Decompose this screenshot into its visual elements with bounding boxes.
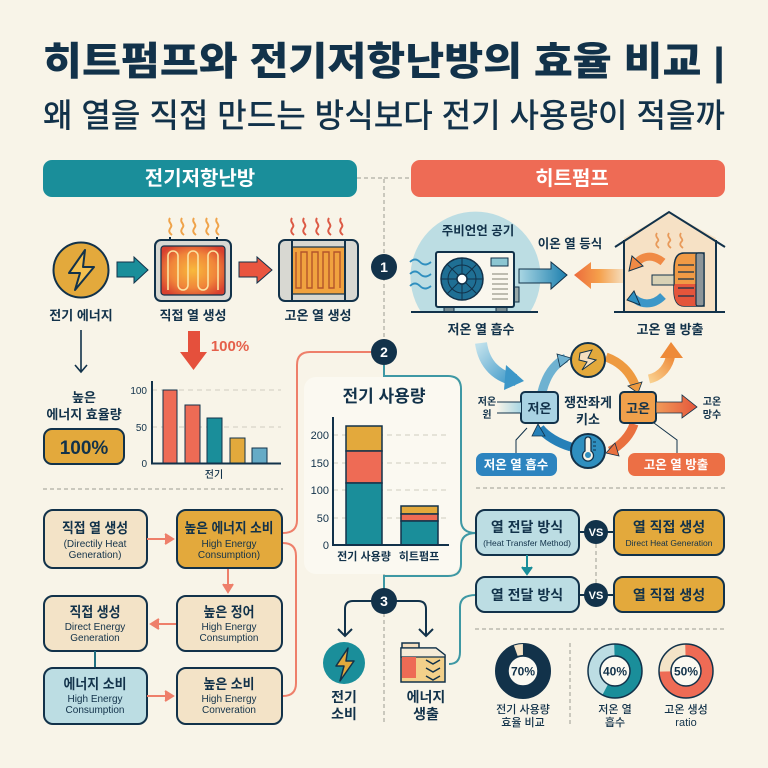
callout: 100 percent bbox=[44, 429, 124, 464]
donut chart: 50 percent: ratio bbox=[675, 717, 697, 729]
label pill: low temp absorption: 저온 열 흡수 bbox=[484, 457, 548, 472]
arrow: energy to heater bbox=[117, 257, 148, 283]
step number 3 bbox=[371, 588, 397, 614]
box: direct generation: 직접 생성 bbox=[70, 604, 120, 620]
step number 3: 3 bbox=[380, 593, 388, 609]
donut chart: 70 percent: 전기 사용량 bbox=[496, 702, 550, 716]
arrow: row 3 bbox=[147, 691, 173, 701]
box: high control: High Energy bbox=[201, 622, 257, 633]
label: electric energy: 전기 에너지 bbox=[49, 308, 113, 323]
label: high temp release: 고온 열 방출 bbox=[636, 322, 704, 337]
bar chart: energy: 50 bbox=[136, 423, 147, 434]
stacked bar chart: 0 bbox=[323, 540, 329, 552]
bar chart: energy bbox=[130, 381, 281, 481]
label: high temp output: 고온 bbox=[703, 396, 721, 408]
stacked bar chart: 50 bbox=[317, 513, 329, 525]
box: direct heat generation: 직접 열 생성 bbox=[62, 520, 128, 536]
box: high consumption: Converation bbox=[202, 705, 256, 716]
box: high energy consumption: High Energy bbox=[201, 539, 257, 550]
label: high temp output bbox=[703, 396, 721, 421]
stacked bar chart bbox=[311, 417, 449, 563]
box: heat transfer method bbox=[476, 510, 579, 555]
VS badge 2: VS bbox=[589, 590, 603, 602]
label: energy output bbox=[407, 689, 445, 722]
step number 1: 1 bbox=[380, 259, 388, 275]
box: high consumption: High Energy bbox=[201, 694, 257, 705]
box: heat transfer method: 열 전달 방식 bbox=[491, 519, 563, 535]
label: low temp absorption: 저온 열 흡수 bbox=[447, 322, 515, 337]
arrow: down bbox=[522, 555, 532, 574]
VS badge 1: VS bbox=[589, 527, 603, 539]
compressor icon bbox=[571, 343, 605, 377]
donut chart: 40 percent bbox=[588, 644, 642, 729]
label: high temp heat: 고온 열 생성 bbox=[284, 308, 352, 323]
label pill: high temp release bbox=[628, 423, 725, 476]
arrow: outdoor to middle bbox=[519, 262, 567, 289]
box: direct generation bbox=[44, 596, 147, 651]
box: energy consumption: 에너지 소비 bbox=[64, 676, 126, 692]
label: electricity consumption: 소비 bbox=[331, 706, 357, 722]
stacked bar chart: 150 bbox=[311, 458, 329, 470]
icon: energy output bbox=[401, 643, 445, 682]
inlet lines bbox=[497, 402, 521, 413]
label: medium: 이온 열 등식 bbox=[538, 236, 602, 251]
box: high energy consumption: Consumption) bbox=[198, 550, 260, 561]
box: direct heat generation: 열 직접 생성 bbox=[633, 519, 705, 535]
stacked bar chart: 히트펌프 bbox=[399, 550, 439, 563]
arrow: high temp output bbox=[656, 395, 697, 418]
box: high energy consumption bbox=[177, 510, 282, 568]
label: electricity consumption bbox=[331, 689, 357, 722]
stacked bar chart: 200 bbox=[311, 430, 329, 442]
label pill: low temp absorption bbox=[476, 428, 557, 476]
box: high control bbox=[177, 596, 282, 651]
box: direct heat generation 2: 열 직접 생성 bbox=[633, 587, 705, 603]
box: high energy consumption: 높은 에너지 소비 bbox=[184, 520, 274, 536]
box: heat transfer method: (Heat Transfer Method) bbox=[483, 538, 571, 548]
icon: high temperature heater bbox=[279, 218, 358, 301]
label: energy output: 에너지 bbox=[407, 689, 445, 705]
step number 2: 2 bbox=[380, 344, 388, 360]
donut chart: 50 percent: 50% bbox=[674, 664, 698, 678]
label: energy output: 생출 bbox=[413, 706, 439, 722]
box: high control: 높은 정어 bbox=[204, 604, 254, 620]
heading: electric resistance heating: 전기저항난방 bbox=[145, 167, 255, 190]
label: high energy efficiency: 높은 bbox=[72, 390, 96, 405]
bar chart: energy: 100 bbox=[130, 386, 147, 397]
donut chart: 70 percent: 효율 비교 bbox=[501, 716, 545, 729]
panel: resistance flow boxes bbox=[44, 510, 282, 724]
box: energy consumption: High Energy bbox=[67, 694, 123, 705]
label pill: high temp release: 고온 열 방출 bbox=[644, 457, 708, 472]
box: heat transfer method 2 bbox=[476, 577, 579, 612]
box: high control: Consumption bbox=[200, 633, 258, 644]
donut chart: 40 percent: 저온 열 bbox=[598, 703, 632, 716]
label: direct heat: 직접 열 생성 bbox=[159, 308, 227, 323]
arrow: down to efficiency bbox=[75, 330, 87, 372]
icon: electric energy bbox=[54, 242, 108, 298]
arrow: house to middle bbox=[574, 262, 624, 289]
callout: 100 percent: 100% bbox=[60, 438, 108, 459]
label: cycle center bbox=[564, 395, 612, 427]
icon: house with indoor unit bbox=[614, 212, 725, 312]
step number 2 bbox=[371, 339, 397, 365]
arrow: absorption to cycle bbox=[481, 343, 524, 390]
step number 1 bbox=[371, 254, 397, 280]
cycle arrows bbox=[540, 357, 635, 451]
panel: heat pump diagram bbox=[410, 212, 725, 476]
box: direct heat generation: (Directily Heat bbox=[64, 539, 127, 550]
label: electricity consumption: 전기 bbox=[331, 689, 357, 705]
arrow: 100 percent down bbox=[180, 331, 207, 370]
donut chart: 50 percent: 고온 생성 bbox=[664, 703, 708, 716]
label: high temp output: 망수 bbox=[703, 408, 721, 421]
heading: heat pump bbox=[411, 160, 725, 197]
box: direct heat generation: Direct Heat Generation bbox=[626, 538, 713, 548]
donut chart: 50 percent bbox=[659, 644, 713, 729]
arrow: step 3 to energy output bbox=[396, 601, 433, 636]
label: high energy efficiency bbox=[46, 390, 122, 422]
arrow: row 2 bbox=[151, 619, 176, 629]
box: energy consumption: Consumption bbox=[66, 705, 124, 716]
box: direct heat generation bbox=[44, 510, 147, 568]
box: high temp: 고온 bbox=[626, 401, 650, 416]
panel: comparison boxes bbox=[476, 510, 724, 612]
bar chart: energy: 전기 bbox=[205, 469, 223, 481]
panel: electricity usage chart bbox=[304, 377, 460, 574]
label: cycle center: 키소 bbox=[576, 412, 600, 427]
box: direct heat generation bbox=[614, 510, 724, 555]
arrow: cycle up to release bbox=[649, 342, 683, 379]
icon: direct heater bbox=[155, 218, 231, 301]
label: 100 percent: 100% bbox=[211, 338, 249, 355]
box: low temp: 저온 bbox=[528, 401, 551, 416]
bar chart: energy: 0 bbox=[141, 459, 147, 470]
title: 히트펌프와 전기저항난방의 효율 비교 | bbox=[43, 41, 725, 84]
box: high consumption: 높은 소비 bbox=[204, 676, 254, 692]
arrow: step 3 to electricity consumption bbox=[338, 601, 372, 636]
stacked bar chart: 전기 사용량 bbox=[337, 549, 391, 563]
panel: electric heating flow bbox=[44, 218, 358, 481]
label: low temp input: 저온 bbox=[478, 395, 496, 408]
arrow: down bbox=[223, 569, 233, 592]
box: energy consumption bbox=[44, 668, 147, 724]
label: low temp input bbox=[478, 395, 496, 421]
label: ambient air: 주비언언 공기 bbox=[442, 223, 514, 238]
chart title: 전기 사용량 bbox=[343, 387, 426, 406]
box: direct generation: Direct Energy bbox=[65, 622, 125, 633]
heading: electric resistance heating bbox=[43, 160, 357, 197]
connector lines bbox=[283, 352, 476, 696]
donut chart: 70 percent bbox=[496, 644, 550, 729]
label: cycle center: 쟁잔좌게 bbox=[564, 395, 612, 410]
donut chart: 40 percent: 흡수 bbox=[605, 715, 625, 729]
box: direct generation: Generation bbox=[70, 633, 120, 644]
icon: electricity consumption bbox=[323, 642, 365, 684]
donut chart: 70 percent: 70% bbox=[511, 664, 535, 678]
thermometer icon bbox=[571, 434, 605, 468]
title bbox=[43, 41, 725, 134]
title: 왜 열을 직접 만드는 방식보다 전기 사용량이 적을까 bbox=[43, 97, 725, 134]
arrow: heater to high temperature bbox=[239, 257, 272, 283]
cycle diagram bbox=[521, 343, 656, 468]
icon: outdoor unit bbox=[410, 212, 540, 312]
arrow: row 1 bbox=[147, 534, 173, 544]
heading: heat pump: 히트펌프 bbox=[535, 167, 609, 190]
VS badge 2 bbox=[579, 583, 614, 607]
box: heat transfer method 2: 열 전달 방식 bbox=[491, 587, 563, 603]
VS badge 1 bbox=[579, 520, 614, 544]
connector bbox=[94, 651, 96, 668]
label: low temp input: 윈 bbox=[482, 408, 492, 421]
box: direct heat generation 2 bbox=[614, 577, 724, 612]
box: direct heat generation: Generation) bbox=[69, 550, 121, 561]
box: high consumption bbox=[177, 668, 282, 724]
label: high energy efficiency: 에너지 효율량 bbox=[46, 407, 122, 422]
stacked bar chart: 100 bbox=[311, 485, 329, 497]
donut chart: 40 percent: 40% bbox=[603, 664, 627, 678]
